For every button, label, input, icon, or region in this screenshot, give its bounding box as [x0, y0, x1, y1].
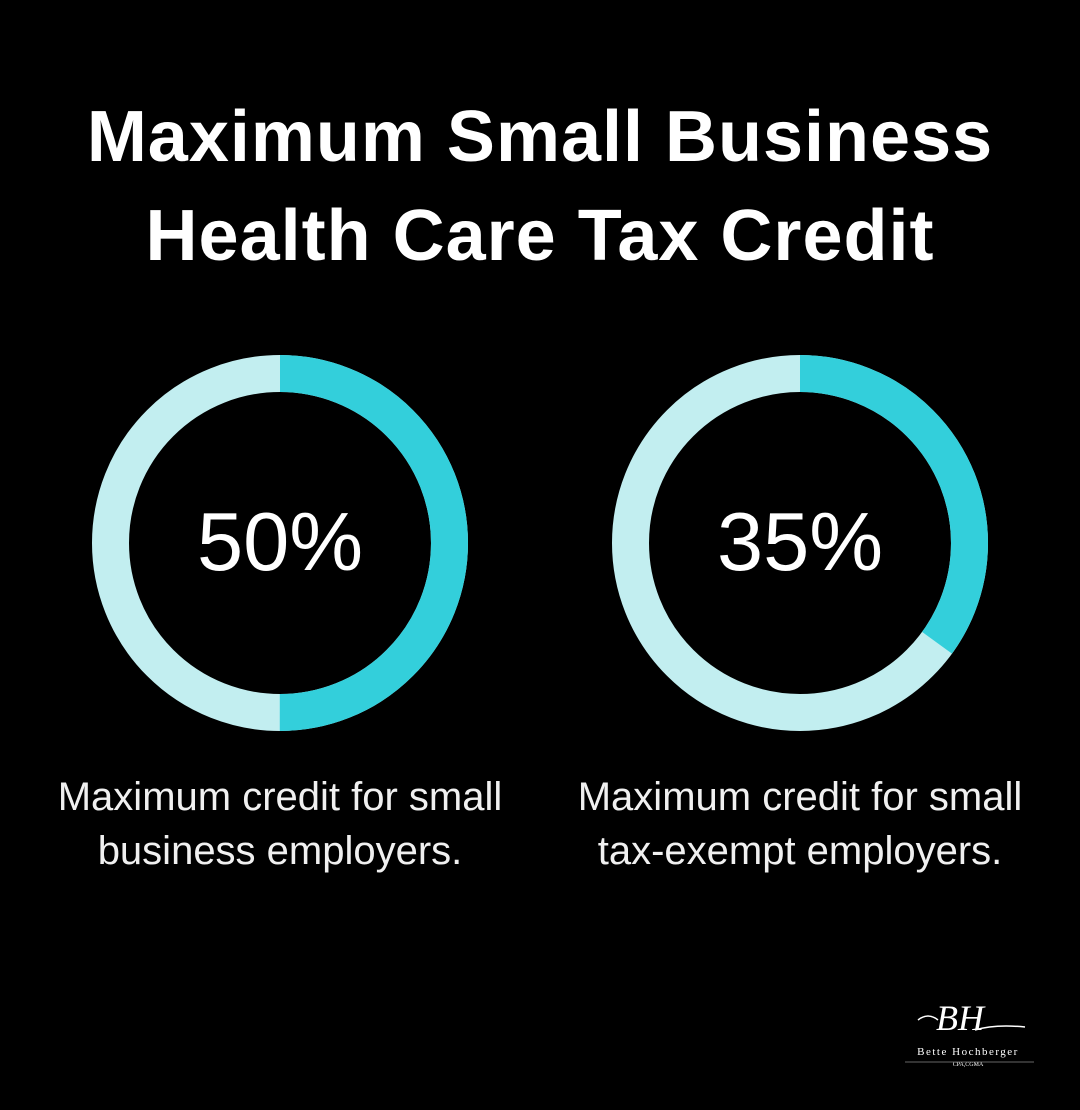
donut: 50%: 50% — [197, 495, 363, 588]
logo — [905, 998, 1034, 1068]
donut: 50% — [110, 374, 450, 712]
donut: 35%: 35% — [717, 495, 883, 588]
caption: 35% — [578, 775, 1022, 873]
caption: 35%: Maximum credit for small — [578, 775, 1022, 819]
logo: BH — [936, 998, 986, 1038]
caption: 35%: tax-exempt employers. — [598, 829, 1002, 873]
donut: 35% — [630, 374, 970, 712]
title: Maximum Small Business — [87, 97, 993, 177]
title — [87, 97, 993, 276]
logo: Bette Hochberger — [917, 1046, 1019, 1058]
title: Health Care Tax Credit — [146, 196, 934, 276]
caption: 50%: business employers. — [98, 829, 462, 873]
caption: 50%: Maximum credit for small — [58, 775, 502, 819]
caption: 50% — [58, 775, 502, 873]
logo: CPA,CGMA — [953, 1062, 984, 1068]
